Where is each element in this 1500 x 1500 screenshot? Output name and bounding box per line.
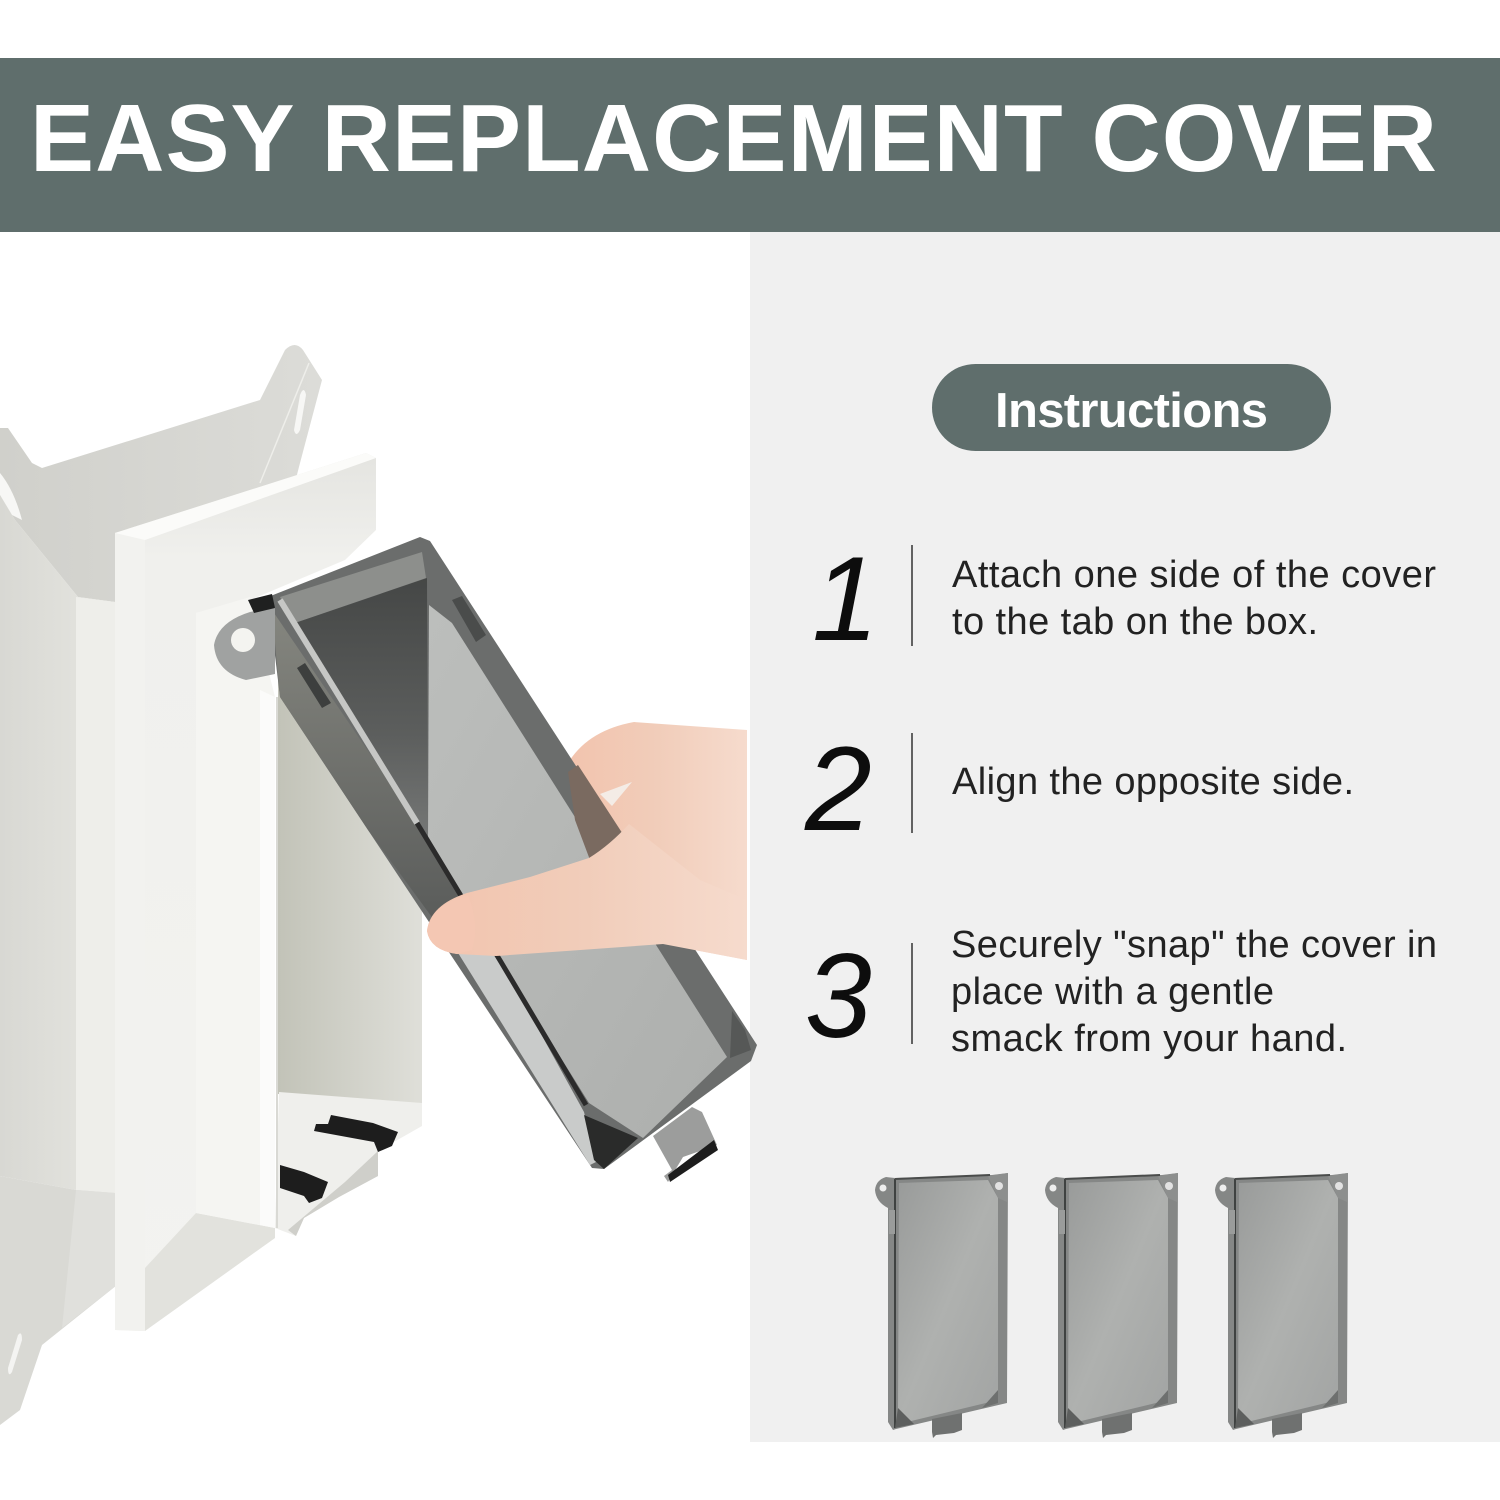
plate edge (115, 525, 145, 1331)
interior floor (275, 1092, 422, 1236)
dark reflective interior (295, 578, 428, 838)
cover 2 (1045, 1173, 1178, 1438)
step 3: place with a gentle (951, 971, 1274, 1013)
step 2: Align the opposite side. (952, 761, 1354, 803)
lower mounting flange (0, 1176, 117, 1425)
step 3: Securely "snap" the cover in (951, 924, 1437, 966)
title: EASY REPLACEMENT COVER (30, 85, 1437, 192)
side latch tabs (297, 663, 331, 708)
fingers seen through cover (568, 765, 630, 860)
hinge ear with peg (214, 594, 275, 680)
lower flange slot (8, 1333, 22, 1374)
step 3: smack from your hand. (951, 1018, 1347, 1060)
front plate (115, 453, 376, 1331)
cover 3 (1215, 1173, 1348, 1438)
step 1: Attach one side of the cover (952, 554, 1436, 596)
light hinge edge (280, 600, 417, 823)
instructions heading pill: Instructions (995, 384, 1268, 438)
box body (0, 495, 115, 1193)
thumb nail (427, 895, 475, 954)
product photo: junction box with hand fitting cover (0, 345, 757, 1425)
background panel: instructions (750, 232, 1500, 1442)
black clips (280, 1115, 398, 1203)
step 1 (812, 532, 1436, 666)
instructions heading pill (932, 364, 1331, 451)
cover side face (272, 610, 490, 950)
transparent cover (268, 537, 757, 1169)
finger gap (600, 782, 632, 806)
step 1: to the tab on the box. (952, 601, 1318, 643)
cover bottom latch (653, 1107, 717, 1182)
upper mounting flange (0, 345, 322, 602)
cover 1 (875, 1173, 1008, 1438)
step 2 (804, 722, 1354, 856)
step 3 (805, 924, 1437, 1063)
raised inner frame (196, 597, 275, 1228)
lower plate fold (145, 1213, 275, 1331)
bottom corner (584, 1115, 638, 1169)
hand: fingers and palm behind cover (570, 722, 747, 960)
three replacement covers (875, 1173, 1348, 1438)
hand: thumb in front of cover (427, 824, 747, 960)
step 2: 2 (804, 722, 872, 856)
top band (280, 552, 426, 623)
cover rim (268, 537, 757, 1169)
interior wall of box (278, 680, 422, 1105)
step 3: 3 (805, 929, 872, 1063)
inner black line (417, 823, 586, 1105)
flange slots (0, 363, 309, 520)
light pane (428, 605, 727, 1138)
banner (0, 58, 1500, 232)
step 1: 1 (812, 532, 879, 666)
silver edge strip (450, 940, 596, 1165)
